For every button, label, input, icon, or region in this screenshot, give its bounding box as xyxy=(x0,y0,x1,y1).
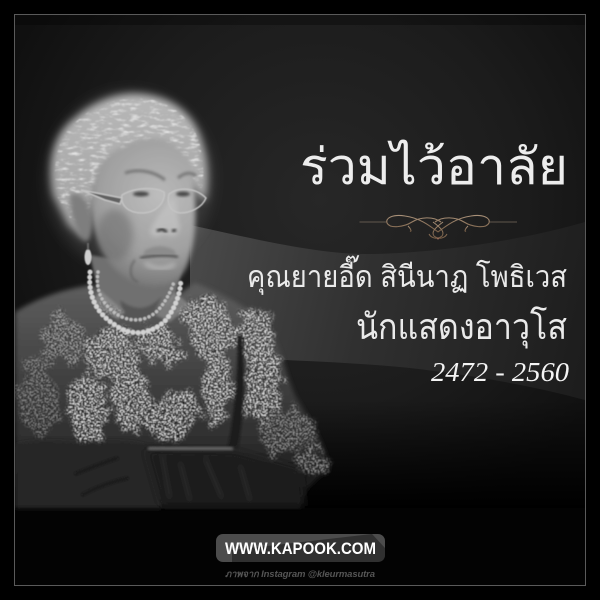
wrinkles xyxy=(131,260,138,282)
ear xyxy=(70,194,92,241)
ornament divider xyxy=(360,215,517,240)
pearl necklace xyxy=(90,272,181,333)
years: 2472 - 2560 xyxy=(431,357,570,387)
hands xyxy=(15,442,163,508)
mouth xyxy=(144,246,176,256)
role line: นักแสดงอาวุโส xyxy=(356,306,567,349)
sleeve cuff xyxy=(146,450,305,506)
nose xyxy=(150,206,180,237)
name line: คุณยายอี๊ด สินีนาฏ โพธิเวส xyxy=(247,255,567,296)
body xyxy=(15,283,330,508)
panel: framed backdrop xyxy=(15,15,585,470)
website badge xyxy=(216,534,385,562)
portrait xyxy=(15,90,335,508)
website badge: WWW.KAPOOK.COM xyxy=(225,539,376,558)
face xyxy=(91,138,195,286)
neck xyxy=(90,255,182,313)
dress fold xyxy=(228,335,244,448)
lace dress pattern xyxy=(15,285,335,485)
cheek shading xyxy=(97,209,133,261)
heading: ร่วมไว้อาลัย xyxy=(300,139,568,195)
collar xyxy=(92,290,190,322)
eyes xyxy=(133,192,190,196)
portrait glow xyxy=(46,90,214,270)
photo credit: ภาพจาก Instagram @kleurmasutra xyxy=(225,569,375,580)
hair xyxy=(51,94,208,240)
earring xyxy=(84,243,92,265)
glasses xyxy=(81,189,206,213)
eyebrows xyxy=(125,171,196,180)
